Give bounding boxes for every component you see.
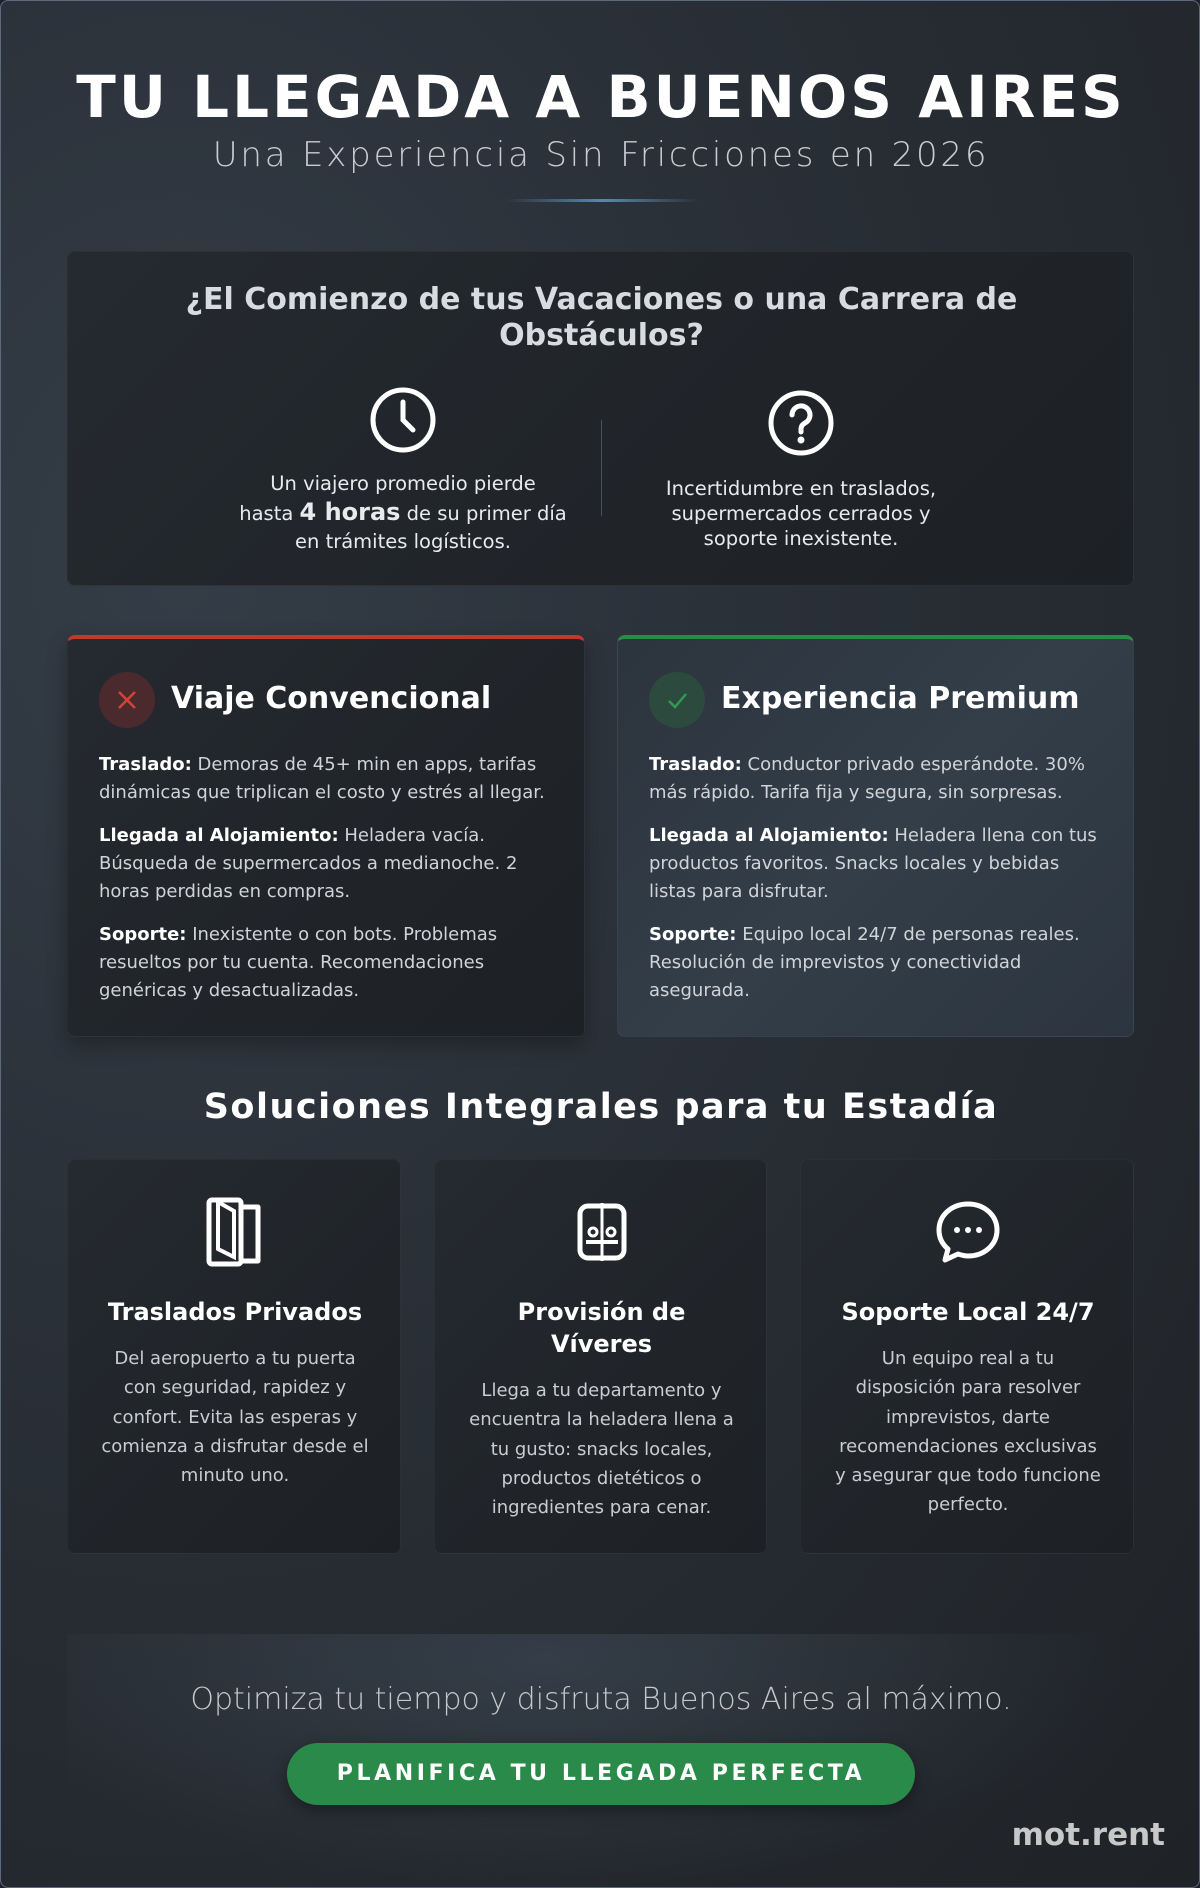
- brand logo: mot.rent: [1012, 1817, 1165, 1853]
- icon: x: [99, 672, 155, 728]
- text: [649, 754, 1097, 1001]
- text: time lost: [239, 472, 567, 553]
- text: Un equipo real a tu disposición para resolver imprevistos, darte recomendaciones exclusivas y asegurar que todo funcione perfecto.: [835, 1348, 1101, 1515]
- text: Soporte: Inexistente o con bots. Problemas resueltos por tu cuenta. Recomendaciones genéricas y desactualizadas.: [99, 924, 497, 1001]
- icon: question: [768, 390, 834, 456]
- closing text: Optimiza tu tiempo y disfruta Buenos Aires al máximo.: [190, 1682, 1012, 1717]
- text: [99, 754, 545, 1001]
- icon: check: [649, 672, 705, 728]
- text: time lost: en trámites logísticos.: [295, 530, 511, 553]
- card: transfers: [67, 1159, 401, 1554]
- icon: fridge: [578, 1203, 626, 1261]
- text: Soporte: Equipo local 24/7 de personas reales. Resolución de imprevistos y conectividad asegurada.: [649, 924, 1080, 1001]
- text: Del aeropuerto a tu puerta con seguridad, rapidez y confort. Evita las esperas y comienza a disfrutar desde el minuto uno.: [101, 1348, 369, 1486]
- text: Llegada al Alojamiento: Heladera llena con tus productos favoritos. Snacks locales y bebidas listas para disfrutar.: [649, 825, 1097, 902]
- title: Soporte Local 24/7: [841, 1298, 1095, 1326]
- text: Llega a tu departamento y encuentra la heladera llena a tu gusto: snacks locales, productos dietéticos o ingredientes para cenar.: [469, 1380, 734, 1518]
- title: TU LLEGADA A BUENOS AIRES: [76, 63, 1126, 131]
- heading: Viaje Convencional: [171, 681, 491, 716]
- card: groceries: [434, 1159, 767, 1554]
- icon: door: [206, 1198, 260, 1266]
- panel: problem intro: [67, 251, 1134, 586]
- panel: premium: [617, 635, 1134, 1037]
- text: Traslado: Demoras de 45+ min en apps, tarifas dinámicas que triplican el costo y estrés al llegar.: [99, 754, 545, 803]
- text: uncertainty: supermercados cerrados y: [671, 502, 931, 525]
- icon: chat: [936, 1202, 1000, 1262]
- heading: ¿El Comienzo de tus Vacaciones o una Carrera de: [186, 282, 1017, 317]
- heading: Experiencia Premium: [721, 681, 1080, 716]
- text: time lost: Un viajero promedio pierde: [270, 472, 536, 495]
- text: time lost: hasta 4 horas de su primer día: [239, 498, 567, 526]
- section heading: Soluciones Integrales para tu Estadía: [204, 1087, 998, 1127]
- text: Traslado: Conductor privado esperándote. 30% más rápido. Tarifa fija y segura, sin sorpresas.: [649, 754, 1085, 803]
- text: uncertainty: [666, 477, 936, 550]
- text: uncertainty: soporte inexistente.: [704, 527, 898, 550]
- button: CTA: PLANIFICA TU LLEGADA PERFECTA: [337, 1761, 865, 1786]
- subtitle: Una Experiencia Sin Fricciones en 2026: [213, 135, 989, 175]
- text: Llegada al Alojamiento: Heladera vacía. Búsqueda de supermercados a medianoche. 2 horas perdidas en compras.: [99, 825, 517, 902]
- title: Traslados Privados: [108, 1298, 362, 1326]
- title: [518, 1298, 685, 1358]
- footer band: [67, 1634, 1134, 1888]
- heading: [186, 282, 1017, 353]
- card: support: [800, 1159, 1134, 1554]
- title: Víveres: [551, 1330, 652, 1358]
- button: CTA: [287, 1743, 915, 1805]
- panel: conventional: [67, 635, 585, 1037]
- icon: clock: [370, 388, 436, 452]
- text: uncertainty: Incertidumbre en traslados,: [666, 477, 936, 500]
- title: Provisión de: [518, 1298, 685, 1326]
- heading: Obstáculos?: [499, 318, 704, 353]
